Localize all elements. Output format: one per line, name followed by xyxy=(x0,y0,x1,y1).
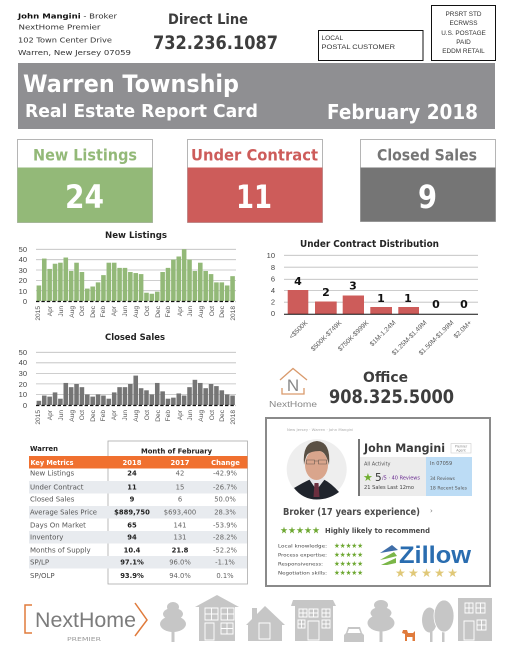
bar chart: new listings: Dec xyxy=(219,305,226,318)
bar chart: closed sales: 10 xyxy=(19,390,27,399)
row: new listings: -42.9% xyxy=(213,470,238,478)
bar chart: new listings: Dec xyxy=(90,305,97,318)
direct line phone: 732.236.1087 xyxy=(153,32,278,54)
rating breakdown: Negotiation skills: xyxy=(278,570,328,576)
row: closed sales: 6 xyxy=(178,496,182,504)
bar chart: closed sales: Oct xyxy=(144,410,151,420)
broker contact block: NextHome Premier xyxy=(18,22,101,32)
bar chart: under contract distribution: $2.0M+ xyxy=(453,319,474,340)
stat card: under contract: Under Contract xyxy=(191,146,318,164)
bar chart: under contract distribution: 6 xyxy=(271,274,275,284)
row: average sales price: $693,400 xyxy=(164,508,196,516)
bar chart: under contract distribution xyxy=(267,239,478,357)
icon: small house xyxy=(246,606,285,641)
bar chart: under contract distribution: 10 xyxy=(267,251,275,260)
local postal customer box xyxy=(318,30,423,60)
rating breakdown: Local knowledge: xyxy=(278,544,328,550)
icon: townhouse xyxy=(458,598,492,641)
bar chart: new listings: 40 xyxy=(19,255,27,264)
postage indicia box: ECRWSS xyxy=(450,20,477,27)
row: months of supply: 21.8 xyxy=(172,546,189,554)
title banner: Real Estate Report Card xyxy=(25,101,258,122)
zillow profile panel: /5 · 40 Reviews xyxy=(382,476,420,482)
row: under contract: -26.7% xyxy=(213,484,238,492)
zillow logo: ★★★★★ xyxy=(395,566,458,580)
zillow profile panel: › xyxy=(430,507,433,515)
postage indicia box: PAID xyxy=(456,39,471,46)
bar chart: under contract distribution: $1.25M-$1.49M xyxy=(391,319,428,357)
bar chart: new listings: Apr xyxy=(111,305,118,316)
zillow profile panel: 5 xyxy=(375,472,382,484)
row: months of supply xyxy=(30,546,238,554)
bar chart: new listings: Feb xyxy=(165,306,172,317)
bar chart: under contract distribution: 0 xyxy=(460,298,468,311)
bar chart: under contract distribution: $750K-$999K xyxy=(337,319,371,353)
bar chart: under contract distribution: 2 xyxy=(322,286,330,299)
row: sp/lp: 96.0% xyxy=(169,558,191,566)
icon: dog xyxy=(402,630,415,641)
row: days on market: -53.9% xyxy=(213,522,238,530)
bar chart: closed sales: Oct xyxy=(79,410,86,420)
zillow profile panel: John Mangini xyxy=(363,441,445,455)
zillow profile panel: 21 Sales Last 12mo xyxy=(364,485,414,491)
row: sp/olp: 93.9% xyxy=(120,572,144,580)
row: months of supply: -52.2% xyxy=(213,546,238,554)
row: new listings: 42 xyxy=(176,470,184,478)
bar chart: closed sales: Feb xyxy=(100,410,107,421)
zillow logo xyxy=(380,542,471,580)
bar chart: under contract distribution: Under Contract Distribution xyxy=(300,239,439,250)
row: closed sales: 50.0% xyxy=(214,496,236,504)
metrics table: Month of February xyxy=(141,448,213,456)
bar chart: new listings: Apr xyxy=(47,305,54,316)
bar chart: new listings: Aug xyxy=(198,306,205,318)
bar chart: closed sales: 50 xyxy=(19,348,27,357)
row: inventory: -28.2% xyxy=(213,534,238,542)
bar chart: new listings: Aug xyxy=(69,306,76,318)
bar chart: under contract distribution: <$500K xyxy=(288,319,310,341)
bar chart: closed sales: Aug xyxy=(133,410,140,422)
row: months of supply: 10.4 xyxy=(124,546,141,554)
row: sp/lp: -1.1% xyxy=(215,558,235,566)
bar chart: closed sales xyxy=(19,333,237,425)
bar chart: new listings: 10 xyxy=(19,287,27,296)
row: average sales price: Average Sales Price xyxy=(30,508,97,516)
stat card: closed sales xyxy=(360,140,496,222)
row: inventory: 131 xyxy=(174,534,186,542)
icon: wide house xyxy=(291,600,336,641)
icon: pair of trees xyxy=(422,600,454,642)
zillow profile panel: In 07059 xyxy=(430,461,452,467)
bar chart: closed sales: 30 xyxy=(19,369,27,378)
bar chart: under contract distribution: $1M-1.24M xyxy=(369,319,397,348)
metrics table: Warren xyxy=(30,445,58,453)
bar chart: new listings: Aug xyxy=(133,306,140,318)
agent portrait xyxy=(287,439,347,500)
bar chart: closed sales: 20 xyxy=(19,380,27,389)
stat card: under contract xyxy=(188,140,322,222)
bar chart: under contract distribution: 1 xyxy=(404,292,412,305)
zillow profile panel: ★ xyxy=(363,471,373,484)
zillow profile panel: Broker (17 years experience) xyxy=(283,507,420,518)
row: new listings: 24 xyxy=(127,470,137,478)
rating breakdown: Responsiveness: xyxy=(278,562,324,568)
row: average sales price xyxy=(30,508,236,516)
stat card: closed sales: Closed Sales xyxy=(377,146,477,164)
bar chart: new listings: 0 xyxy=(23,297,27,306)
bar chart: under contract distribution: 8 xyxy=(271,263,275,272)
bar chart: new listings: Feb xyxy=(100,306,107,317)
bar chart: closed sales: 40 xyxy=(19,358,27,367)
metrics table: Change xyxy=(211,459,240,467)
bar chart: closed sales: Apr xyxy=(177,409,184,420)
row: sp/lp: 97.1% xyxy=(120,558,144,566)
office phone: Office xyxy=(363,370,408,386)
row: under contract: Under Contract xyxy=(30,484,84,492)
bar chart: new listings: Oct xyxy=(209,306,216,316)
broker contact block: John Mangini - Broker xyxy=(17,12,117,20)
row: sp/olp xyxy=(30,572,234,580)
footer nexthome premier logo: PREMIER xyxy=(67,637,102,643)
zillow profile panel: Agent xyxy=(456,448,466,452)
row: closed sales xyxy=(30,496,236,504)
metrics table: 2018 xyxy=(123,459,142,467)
zillow profile panel: Highly likely to recommend xyxy=(325,527,430,535)
zillow profile panel: 18 Recent Sales xyxy=(430,486,467,490)
bar chart: closed sales: Apr xyxy=(47,409,54,420)
icon: nexthome house logo xyxy=(269,368,318,409)
title banner xyxy=(18,63,495,129)
stat card: new listings: New Listings xyxy=(33,146,137,164)
bar chart: closed sales: Dec xyxy=(90,409,97,422)
bar chart: new listings: Dec xyxy=(155,305,162,318)
rating breakdown: ★★★★★ xyxy=(334,569,363,577)
bar chart: new listings: 2015 xyxy=(35,306,42,321)
bar chart: new listings: Jun xyxy=(58,306,65,317)
row: sp/olp: 0.1% xyxy=(216,572,234,580)
row: months of supply: Months of Supply xyxy=(30,546,91,554)
bar chart: under contract distribution: $500K-$749K xyxy=(310,319,344,353)
rating breakdown xyxy=(278,542,363,577)
row: days on market: 141 xyxy=(174,522,186,530)
stat card: under contract: 11 xyxy=(236,178,272,216)
zillow profile panel: New Jersey · Warren · John Mangini xyxy=(287,427,353,432)
zillow profile panel: Premier xyxy=(455,444,468,448)
stat card: closed sales: 9 xyxy=(418,178,437,216)
bar chart: closed sales: Aug xyxy=(69,410,76,422)
bar chart: new listings: 50 xyxy=(19,245,27,254)
row: days on market: 65 xyxy=(127,522,137,530)
row: under contract: 11 xyxy=(127,484,137,492)
row: sp/olp: 94.0% xyxy=(169,572,191,580)
rating breakdown: ★★★★★ xyxy=(334,551,363,559)
bar chart: closed sales: Aug xyxy=(198,410,205,422)
bar chart: closed sales: 0 xyxy=(23,401,27,410)
zillow profile panel: All Activity xyxy=(364,462,391,468)
icon: car xyxy=(344,627,364,642)
icon: tree xyxy=(160,602,186,642)
row: sp/olp: SP/OLP xyxy=(30,572,55,580)
row: days on market: Days On Market xyxy=(30,522,86,530)
bar chart: new listings: 20 xyxy=(19,276,27,285)
row: sp/lp: SP/LP xyxy=(30,558,49,566)
bar chart: new listings: 30 xyxy=(19,266,27,275)
bar chart: new listings: 2018 xyxy=(230,306,237,321)
office phone: 908.325.5000 xyxy=(329,386,454,408)
row: inventory xyxy=(30,534,238,542)
metrics table xyxy=(29,441,248,584)
row: inventory: Inventory xyxy=(30,534,63,542)
title banner: February 2018 xyxy=(327,100,478,124)
broker contact block xyxy=(17,12,131,57)
postage indicia box: EDDM RETAIL xyxy=(442,48,485,55)
row: days on market xyxy=(30,522,238,530)
row: average sales price: $889,750 xyxy=(114,508,150,516)
bar chart: under contract distribution: 2 xyxy=(271,298,275,306)
bar chart: closed sales: Apr xyxy=(111,409,118,420)
icon: nexthome house logo: NextHome xyxy=(269,400,318,409)
postage indicia box: U.S. POSTAGE xyxy=(441,30,486,37)
rating breakdown: ★★★★★ xyxy=(334,542,363,550)
title banner: Warren Township xyxy=(23,70,239,98)
bar chart: under contract distribution: $1.50M-$1.99M xyxy=(418,319,455,357)
bar chart: closed sales: Dec xyxy=(155,409,162,422)
stat card: new listings xyxy=(18,140,152,222)
bar chart: closed sales: Feb xyxy=(165,410,172,421)
bar chart: closed sales: Dec xyxy=(219,409,226,422)
rating breakdown: ★★★★★ xyxy=(334,560,363,568)
zillow profile panel: 34 Reviews xyxy=(430,476,456,482)
footer nexthome premier logo xyxy=(25,603,147,643)
metrics table: 2017 xyxy=(171,459,190,467)
bar chart: under contract distribution: 3 xyxy=(349,280,357,292)
row: average sales price: 28.3% xyxy=(214,508,236,516)
direct line phone xyxy=(153,12,278,54)
bar chart: new listings xyxy=(19,231,237,321)
row: inventory: 94 xyxy=(127,534,137,542)
bar chart: new listings: Apr xyxy=(177,305,184,316)
row: new listings xyxy=(30,470,238,478)
row: closed sales: Closed Sales xyxy=(30,496,75,504)
local postal customer box: LOCAL xyxy=(322,35,343,42)
bar chart: under contract distribution: 4 xyxy=(294,275,302,288)
bar chart: new listings: Jun xyxy=(187,306,194,317)
bar chart: new listings: Oct xyxy=(79,306,86,316)
bar chart: closed sales: Closed Sales xyxy=(105,333,165,343)
metrics table: Key Metrics xyxy=(30,459,74,467)
row: sp/lp xyxy=(30,558,235,566)
bar chart: closed sales: 2018 xyxy=(230,410,237,425)
zillow profile panel xyxy=(266,418,490,586)
row: new listings: New Listings xyxy=(30,470,75,478)
bar chart: closed sales: Oct xyxy=(209,410,216,420)
postage indicia box xyxy=(432,6,496,60)
row: under contract xyxy=(30,484,238,492)
bar chart: new listings: Oct xyxy=(144,306,151,316)
bar chart: closed sales: Jun xyxy=(58,410,65,421)
postage indicia box: PRSRT STD xyxy=(446,11,482,18)
direct line phone: Direct Line xyxy=(168,12,248,28)
rating breakdown: Process expertise: xyxy=(278,552,328,558)
bar chart: new listings: Jun xyxy=(122,306,129,317)
footer nexthome premier logo: NextHome xyxy=(35,609,136,632)
office phone xyxy=(329,370,454,408)
bar chart: under contract distribution: 4 xyxy=(271,286,275,295)
icon: tree xyxy=(368,600,394,642)
icon: two-storey house xyxy=(195,595,239,641)
icon: nexthome house logo: N xyxy=(287,376,299,395)
broker contact block: 102 Town Center Drive xyxy=(18,36,113,44)
bar chart: under contract distribution: 0 xyxy=(271,309,275,318)
local postal customer box: POSTAL CUSTOMER xyxy=(322,44,395,51)
row: under contract: 15 xyxy=(176,484,184,492)
stat card: new listings: 24 xyxy=(65,178,104,216)
row: closed sales: 9 xyxy=(130,496,135,504)
bar chart: closed sales: Jun xyxy=(122,410,129,421)
zillow logo: Zillow xyxy=(399,542,471,569)
zillow profile panel: ★★★★★ xyxy=(280,526,320,536)
bar chart: new listings: New Listings xyxy=(105,231,167,241)
broker contact block: Warren, New Jersey 07059 xyxy=(18,48,131,57)
bar chart: under contract distribution: 0 xyxy=(432,298,440,311)
bar chart: closed sales: Jun xyxy=(187,410,194,421)
bar chart: closed sales: 2015 xyxy=(35,410,42,425)
bar chart: under contract distribution: 1 xyxy=(377,292,385,305)
